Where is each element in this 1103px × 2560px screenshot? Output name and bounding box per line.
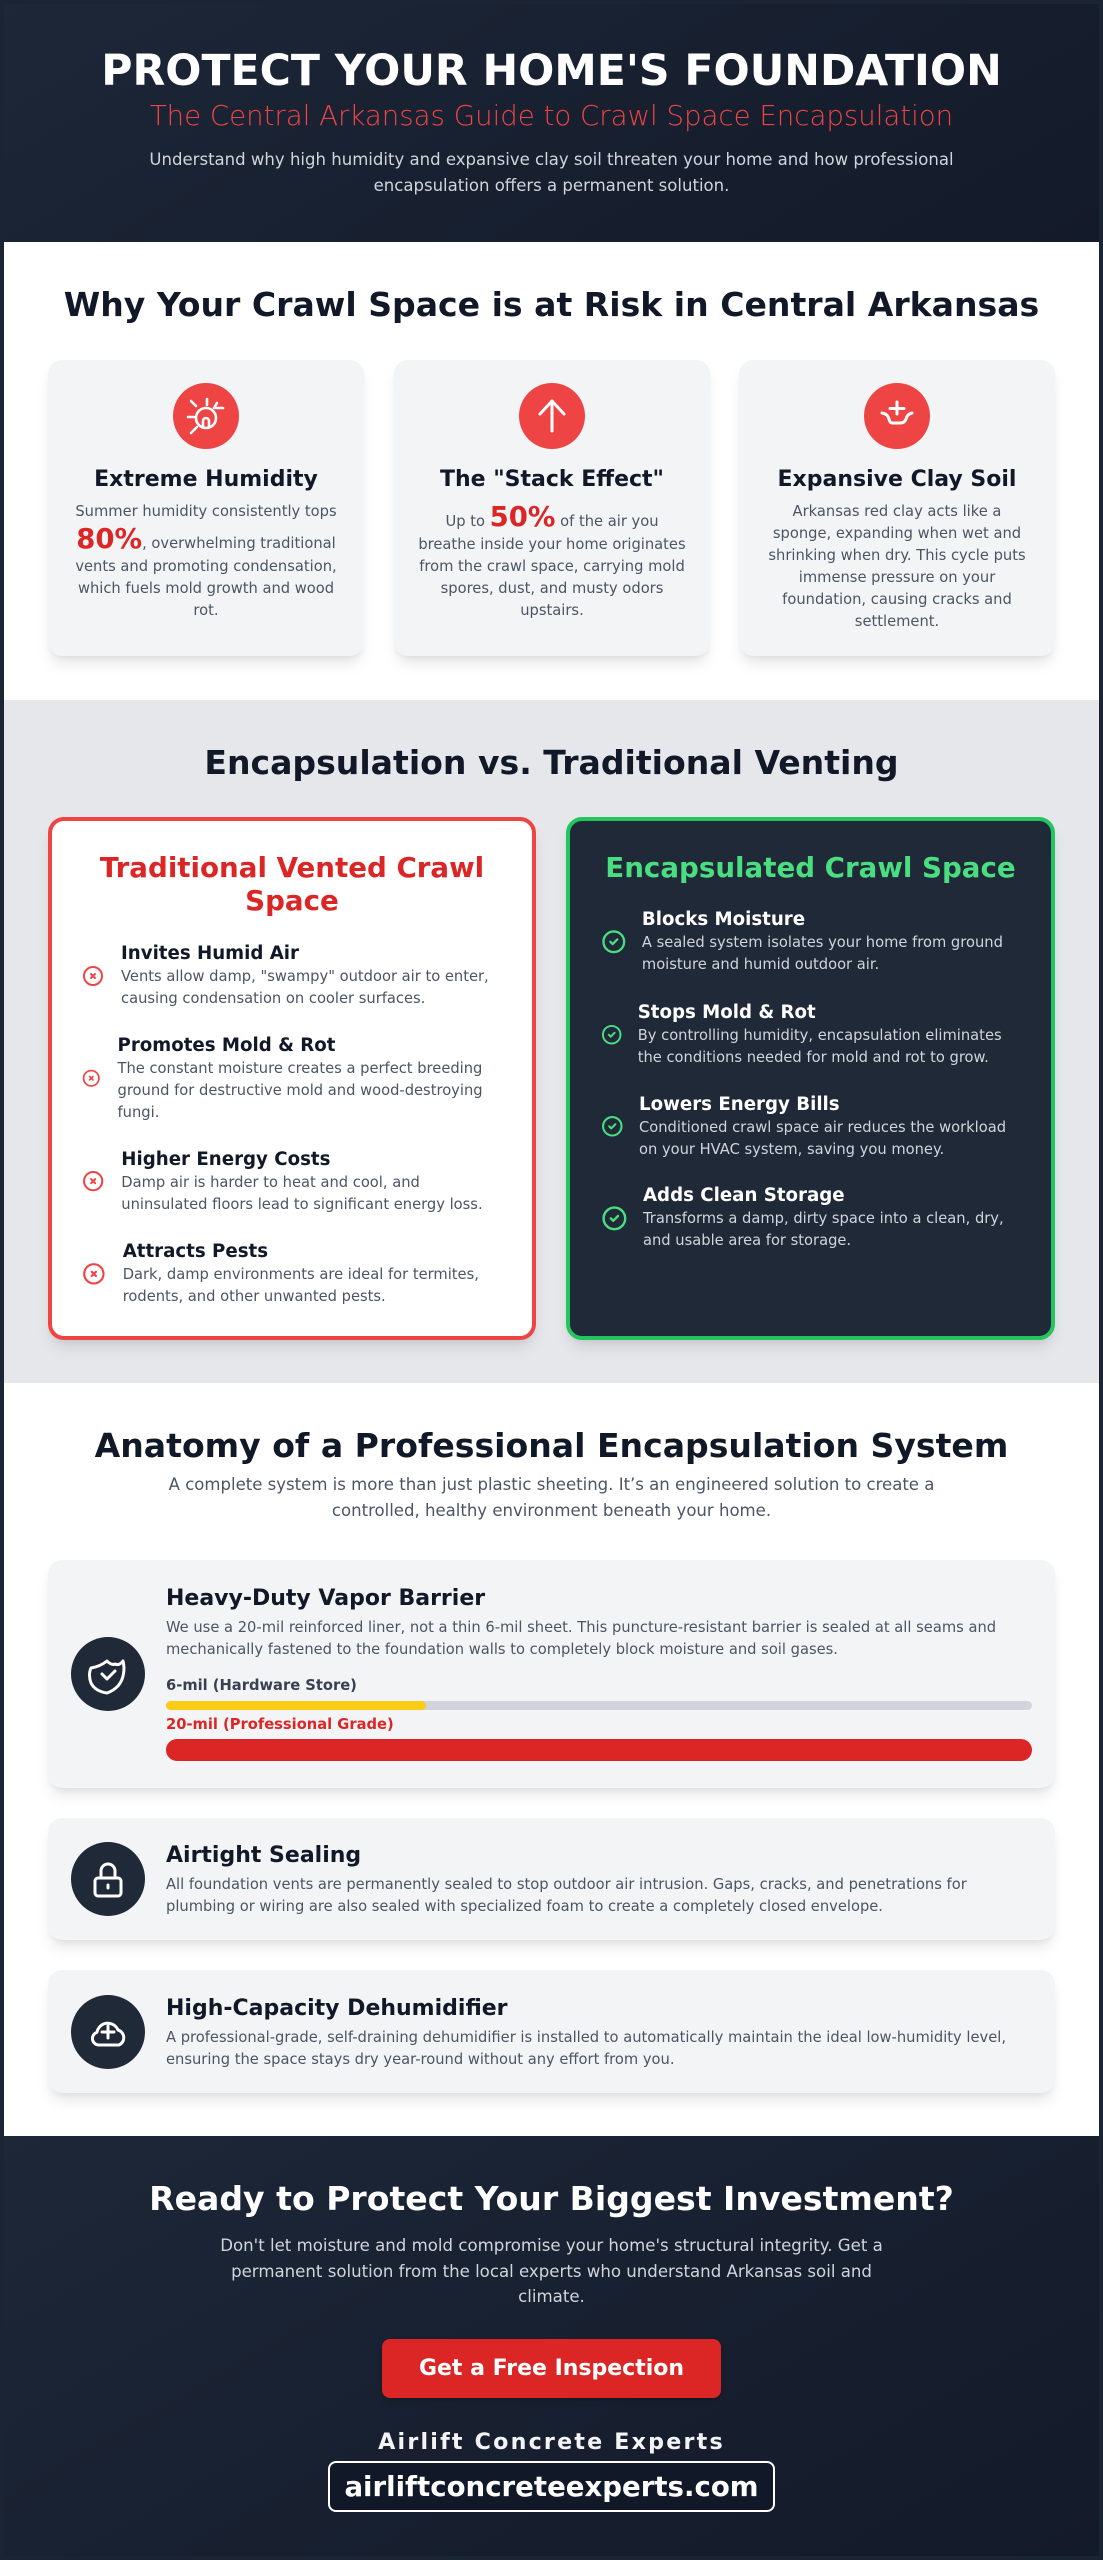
item: invites humid air: causing condensation on cooler surfaces. — [121, 990, 425, 1006]
card text: ensuring the space stays dry year-round without any effort from you. — [166, 2050, 675, 2068]
icon: check — [602, 930, 626, 954]
card text — [166, 1618, 996, 1658]
item: blocks moisture: moisture and humid outdoor air. — [642, 956, 879, 973]
item: adds clean storage: Transforms a damp, dirty space into a clean, dry, — [643, 1210, 1004, 1227]
card text: plumbing or wiring are also sealed with specialized foam to create a completely closed envelope. — [166, 1898, 883, 1915]
bar label: 6-mil: 6-mil (Hardware Store) — [166, 1677, 357, 1694]
panel title — [100, 851, 484, 917]
card text: We use a 20-mil reinforced liner, not a thin 6-mil sheet. This puncture-resistant barrier is sealed at all seams and — [166, 1618, 996, 1636]
card text: breathe inside your home originates — [418, 536, 686, 553]
item: lowers energy bills: on your HVAC system, saving you money. — [639, 1140, 944, 1158]
item: promotes mold: ground for destructive mold and wood-destroying — [118, 1082, 483, 1098]
company name: Airlift Concrete Experts — [378, 2429, 725, 2455]
card text: settlement. — [855, 613, 939, 630]
icon: x — [83, 966, 103, 986]
card text: shrinking when dry. This cycle puts — [768, 547, 1026, 564]
icon: check — [602, 1025, 622, 1044]
item: attracts pests — [83, 1240, 479, 1304]
button: free inspection — [382, 2339, 721, 2398]
panel title: Traditional Vented Crawl — [100, 851, 484, 884]
icon: humidity sun — [173, 383, 239, 449]
header banner — [0, 0, 1103, 242]
footer text: permanent solution from the local experts who understand Arkansas soil and — [231, 2262, 872, 2281]
card title: Extreme Humidity — [94, 467, 318, 492]
title: PROTECT YOUR HOME'S FOUNDATION — [101, 46, 1002, 96]
heading: risks: Why Your Crawl Space is at Risk in Central Arkansas — [64, 285, 1039, 324]
bar: 20-mil — [166, 1739, 1032, 1761]
heading: anatomy: Anatomy of a Professional Encapsulation System — [95, 1426, 1008, 1465]
item: promotes mold: The constant moisture creates a perfect breeding — [118, 1060, 482, 1076]
footer heading: Ready to Protect Your Biggest Investment? — [149, 2179, 954, 2218]
item: lowers energy bills: Conditioned crawl space air reduces the workload — [639, 1118, 1006, 1136]
item: blocks moisture: Blocks Moisture — [642, 909, 805, 930]
card: stack effect — [394, 360, 710, 656]
section: anatomy background — [0, 1383, 1103, 2136]
item: lowers energy bills — [602, 1094, 1006, 1158]
bar: 6-mil — [166, 1701, 1032, 1710]
card title: High-Capacity Dehumidifier — [166, 1996, 508, 2020]
card text: Up to 50% of the air you — [445, 501, 659, 533]
card title: Airtight Sealing — [166, 1843, 361, 1868]
anatomy intro — [168, 1475, 934, 1520]
intro text — [149, 150, 954, 195]
website box — [328, 2461, 775, 2512]
item: invites humid air: Vents allow damp, "swampy" outdoor air to enter, — [121, 968, 489, 984]
icon: lock — [71, 1842, 145, 1916]
card: vapor barrier — [48, 1560, 1055, 1788]
footer text — [220, 2236, 883, 2306]
icon: check — [602, 1206, 626, 1230]
item: stops mold: the conditions needed for mold and rot to grow. — [638, 1048, 989, 1066]
card text: which fuels mold growth and wood — [78, 580, 334, 597]
website box: airliftconcreteexperts.com — [344, 2470, 759, 2503]
anatomy intro: controlled, healthy environment beneath your home. — [332, 1501, 771, 1520]
item: invites humid air — [83, 942, 489, 1006]
item: blocks moisture — [602, 909, 1003, 973]
section: comparison background — [0, 700, 1103, 1383]
item: higher energy costs: uninsulated floors lead to significant energy loss. — [121, 1196, 483, 1212]
card title: The "Stack Effect" — [440, 467, 664, 492]
card text: foundation, causing cracks and — [782, 591, 1012, 608]
item: higher energy costs: Higher Energy Costs — [121, 1148, 330, 1170]
card text: Arkansas red clay acts like a — [793, 503, 1001, 520]
card text — [768, 503, 1026, 630]
card title: Heavy-Duty Vapor Barrier — [166, 1586, 485, 1610]
card: clay soil — [739, 360, 1055, 656]
card text: All foundation vents are permanently sealed to stop outdoor air intrusion. Gaps, cracks, and penetrations for — [166, 1876, 967, 1893]
panel: traditional vented — [48, 817, 536, 1340]
item: stops mold — [602, 1002, 1002, 1066]
card text: sponge, expanding when wet and — [773, 525, 1021, 542]
card text: immense pressure on your — [799, 569, 995, 586]
footer text: climate. — [518, 2287, 585, 2306]
icon: x — [83, 1171, 104, 1192]
footer text: Don't let moisture and mold compromise your home's structural integrity. Get a — [220, 2236, 883, 2255]
item: attracts pests: rodents, and other unwanted pests. — [123, 1288, 386, 1304]
card text: from the crawl space, carrying mold — [419, 558, 685, 575]
card text: rot. — [193, 602, 219, 619]
item: lowers energy bills: Lowers Energy Bills — [639, 1094, 840, 1114]
icon: x — [82, 1070, 100, 1087]
card: dehumidifier — [48, 1970, 1055, 2093]
icon: x — [83, 1263, 105, 1284]
footer call to action — [0, 2136, 1103, 2560]
item: higher energy costs — [83, 1148, 483, 1212]
card text: 80%, overwhelming traditional — [76, 523, 336, 555]
panel: encapsulated — [566, 817, 1055, 1340]
item: stops mold: By controlling humidity, encapsulation eliminates — [638, 1026, 1002, 1044]
bar label: 20-mil: 20-mil (Professional Grade) — [166, 1716, 394, 1733]
icon: up arrow — [519, 383, 585, 449]
card text — [75, 503, 337, 619]
card: extreme humidity — [48, 360, 364, 656]
card text: upstairs. — [520, 602, 584, 619]
item: promotes mold: fungi. — [118, 1104, 159, 1120]
panel title: Space — [245, 884, 339, 917]
card text — [418, 501, 686, 619]
section: risks — [0, 242, 1103, 700]
item: blocks moisture: A sealed system isolates your home from ground — [642, 934, 1003, 951]
item: adds clean storage: and usable area for storage. — [643, 1232, 851, 1249]
intro text: Understand why high humidity and expansive clay soil threaten your home and how professional — [149, 150, 954, 169]
bar chart: liner thickness — [166, 1677, 1032, 1761]
icon: clay soil — [864, 383, 930, 449]
anatomy intro: A complete system is more than just plastic sheeting. It’s an engineered solution to create a — [169, 1475, 934, 1494]
item: attracts pests: Attracts Pests — [123, 1240, 268, 1262]
card: airtight sealing — [48, 1818, 1055, 1940]
card text: spores, dust, and musty odors — [441, 580, 663, 597]
card title: Expansive Clay Soil — [778, 467, 1016, 492]
card text — [166, 2028, 1006, 2068]
item: attracts pests: Dark, damp environments are ideal for termites, — [123, 1266, 479, 1282]
item: invites humid air: Invites Humid Air — [121, 942, 299, 964]
item: higher energy costs: Damp air is harder to heat and cool, and — [121, 1174, 420, 1190]
item: promotes mold — [82, 1034, 483, 1120]
item: adds clean storage: Adds Clean Storage — [643, 1185, 845, 1206]
item: adds clean storage — [602, 1185, 1004, 1249]
card text: Summer humidity consistently tops — [75, 503, 337, 520]
icon: cloud plus — [71, 1995, 145, 2069]
icon: check — [602, 1116, 623, 1136]
intro text: encapsulation offers a permanent solution. — [374, 176, 729, 195]
card text: A professional-grade, self-draining dehumidifier is installed to automatically maintain the ideal low-humidity level, — [166, 2028, 1006, 2046]
card text — [166, 1876, 967, 1915]
card text: vents and promoting condensation, — [75, 558, 337, 575]
panel title: Encapsulated Crawl Space — [605, 851, 1016, 884]
card text: mechanically fastened to the foundation walls to completely block moisture and soil gases. — [166, 1640, 838, 1658]
item: stops mold: Stops Mold & Rot — [638, 1002, 816, 1022]
subtitle: The Central Arkansas Guide to Crawl Space Encapsulation — [150, 99, 953, 132]
icon: shield check — [71, 1637, 145, 1711]
heading: comparison: Encapsulation vs. Traditional Venting — [204, 743, 899, 782]
item: promotes mold: Promotes Mold & Rot — [118, 1034, 336, 1056]
button: free inspection: Get a Free Inspection — [419, 2356, 684, 2381]
